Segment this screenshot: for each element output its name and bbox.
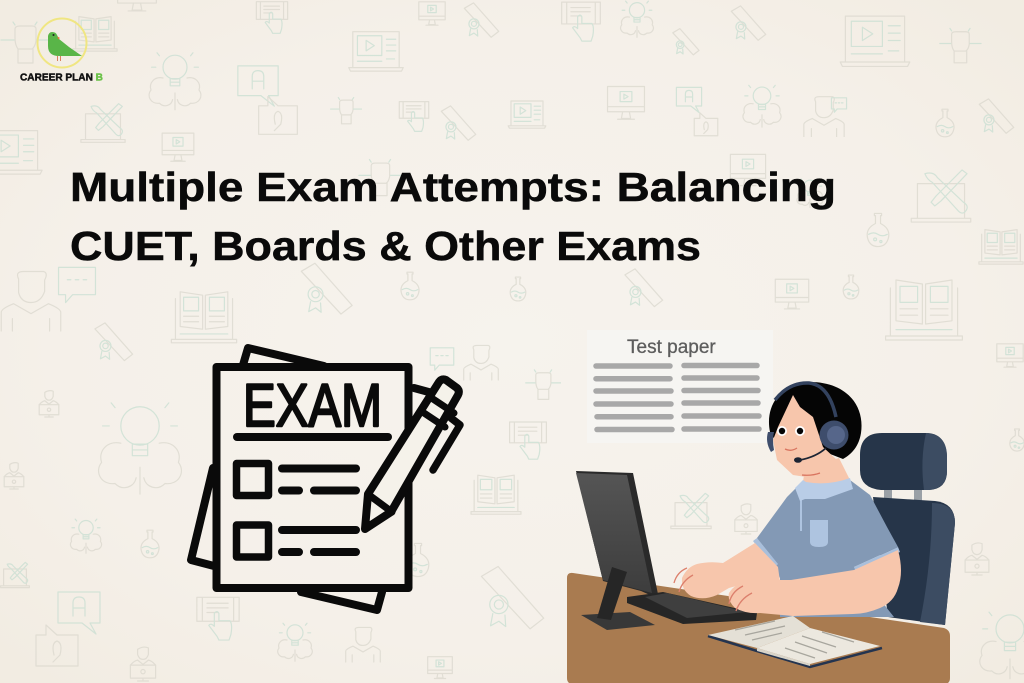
office chair [860, 433, 955, 625]
collar [795, 478, 853, 501]
test paper panel [587, 330, 773, 443]
title: Multiple Exam Attempts: Balancing [70, 164, 836, 210]
EXAM heading: EXAM [243, 372, 382, 439]
sleeve cuffs [753, 538, 900, 572]
keyboard [627, 592, 757, 624]
heading underline [237, 433, 388, 441]
computer monitor and stand [576, 471, 659, 630]
eyes [777, 426, 787, 436]
far arm and hand [682, 543, 780, 598]
shirt [757, 480, 898, 617]
open book [708, 616, 882, 667]
hair [769, 382, 862, 459]
person with headset [674, 382, 901, 617]
mouth and chin [785, 448, 820, 475]
back sheet [191, 348, 436, 610]
near arm and hand [729, 550, 901, 616]
checklist row two [236, 525, 356, 557]
logo: Career Plan B: CAREER PLAN B [20, 72, 103, 84]
pencil [365, 379, 460, 529]
checklist row one [236, 464, 356, 496]
icon: exam paper and pencil [191, 348, 460, 610]
title: CUET, Boards & Other Exams [70, 223, 701, 269]
test paper panel: Test paper [627, 337, 716, 358]
logo: Career Plan B [20, 18, 103, 84]
desk [567, 573, 950, 683]
finger lines [674, 568, 752, 611]
title [70, 164, 836, 269]
headset [775, 383, 836, 417]
neck [803, 458, 850, 490]
face [773, 395, 837, 478]
pocket [810, 520, 828, 547]
front sheet [216, 367, 408, 588]
